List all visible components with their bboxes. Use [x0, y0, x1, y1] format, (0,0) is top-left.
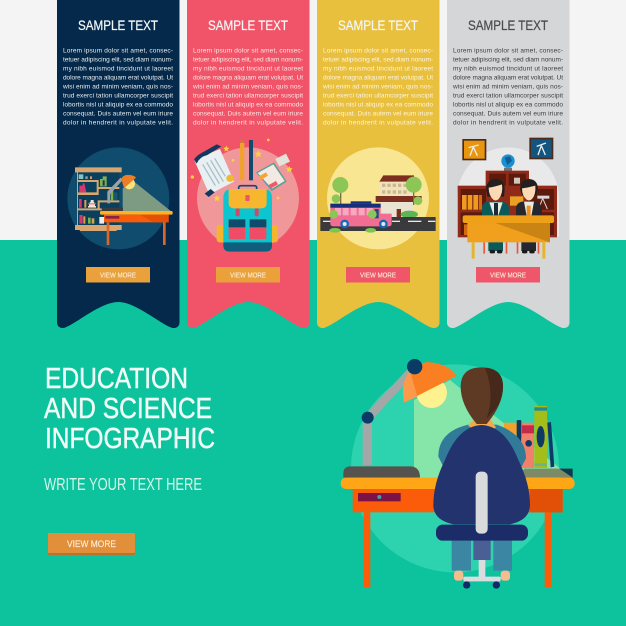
button: yellow ribbon — [346, 267, 410, 282]
text block: coral ribbon — [192, 48, 303, 126]
person and chair — [433, 367, 530, 589]
button: main view more — [48, 533, 135, 555]
text block: navy ribbon: tetuer adipiscing elit, sed diam nonum- — [63, 56, 173, 64]
lamp light beam — [414, 380, 560, 478]
text block: yellow ribbon: consequat. Duis autem vel eum iriure — [323, 110, 433, 118]
title: AND SCIENCE — [44, 393, 212, 425]
text block: coral ribbon: consequat. Duis autem vel eum iriure — [193, 110, 303, 118]
text block: navy ribbon — [62, 48, 173, 126]
text block: grey ribbon: lobortis nisl ut aliquip ex ea commodo — [453, 102, 563, 108]
text block: navy ribbon: Lorem ipsum dolor sit amet, consec- — [63, 48, 173, 54]
text block: grey ribbon: dolor in hendrerit in vulputate velit. — [453, 120, 563, 126]
text block: grey ribbon: tetuer adipiscing elit, sed diam nonum- — [453, 56, 563, 64]
text block: yellow ribbon: dolore magna aliquam erat volutpat. Ut — [323, 74, 433, 82]
text block: navy ribbon: trud exerci tation ullamcorper suscipit — [63, 92, 173, 100]
text block: coral ribbon: wisi enim ad minim veniam, quis nos- — [192, 84, 303, 90]
text block: grey ribbon — [452, 48, 563, 126]
heading: yellow ribbon: SAMPLE TEXT — [338, 17, 418, 33]
text block: yellow ribbon: lobortis nisl ut aliquip ex ea commodo — [323, 102, 433, 108]
text block: navy ribbon: lobortis nisl ut aliquip ex ea commodo — [63, 102, 173, 108]
heading: coral ribbon: SAMPLE TEXT — [208, 17, 288, 33]
text block: coral ribbon: my nibh euismod tincidunt ut laoreet — [193, 66, 303, 72]
text block: coral ribbon: trud exerci tation ullamcorper suscipit — [193, 92, 303, 100]
button: navy ribbon: VIEW MORE — [100, 272, 136, 280]
text block: navy ribbon: my nibh euismod tincidunt ut laoreet — [63, 66, 173, 72]
text block: yellow ribbon: dolor in hendrerit in vulputate velit. — [323, 120, 433, 126]
button: navy ribbon — [86, 267, 150, 282]
background circle — [351, 364, 559, 572]
illustration: student at desk from behind — [341, 359, 575, 589]
heading: navy ribbon: SAMPLE TEXT — [78, 17, 158, 33]
text block: yellow ribbon — [322, 48, 433, 126]
text block: coral ribbon: dolor in hendrerit in vulputate velit. — [193, 120, 303, 126]
text block: grey ribbon: wisi enim ad minim veniam, quis nos- — [452, 84, 563, 90]
illustration: students at desk in library — [457, 138, 559, 259]
text block: coral ribbon: lobortis nisl ut aliquip ex ea commodo — [193, 102, 303, 108]
text block: yellow ribbon: wisi enim ad minim veniam, quis nos- — [322, 84, 433, 90]
illustration: bookshelf and desk lamp — [67, 147, 173, 249]
text block: navy ribbon: wisi enim ad minim veniam, quis nos- — [62, 84, 173, 90]
text block: grey ribbon: my nibh euismod tincidunt ut laoreet — [453, 66, 563, 72]
lamp — [343, 359, 457, 478]
text block: navy ribbon: dolor in hendrerit in vulputate velit. — [63, 120, 173, 126]
button: grey ribbon: VIEW MORE — [490, 272, 526, 280]
illustration: backpack and school supplies — [191, 139, 299, 252]
text block: yellow ribbon: tetuer adipiscing elit, sed diam nonum- — [323, 56, 433, 64]
books — [504, 406, 573, 478]
title: EDUCATION — [45, 363, 188, 395]
title: INFOGRAPHIC — [45, 423, 215, 455]
text block: navy ribbon: dolore magna aliquam erat volutpat. Ut — [63, 74, 173, 82]
text block: grey ribbon: trud exerci tation ullamcorper suscipit — [453, 92, 563, 100]
button: coral ribbon — [216, 267, 280, 282]
text block: yellow ribbon: Lorem ipsum dolor sit amet, consec- — [323, 48, 433, 54]
heading: grey ribbon: SAMPLE TEXT — [468, 17, 548, 33]
button: main view more: VIEW MORE — [67, 539, 116, 549]
panel: yellow ribbon — [317, 0, 440, 328]
panel: navy ribbon — [57, 0, 180, 328]
text block: coral ribbon: tetuer adipiscing elit, sed diam nonum- — [193, 56, 303, 64]
button: coral ribbon: VIEW MORE — [230, 272, 266, 280]
illustration: school bus and building — [320, 147, 436, 249]
text block: navy ribbon: consequat. Duis autem vel eum iriure — [63, 110, 173, 118]
title — [44, 363, 215, 455]
text block: yellow ribbon: trud exerci tation ullamcorper suscipit — [323, 92, 433, 100]
button: grey ribbon — [476, 267, 540, 282]
text block: coral ribbon: dolore magna aliquam erat volutpat. Ut — [193, 74, 303, 82]
text block: grey ribbon: dolore magna aliquam erat volutpat. Ut — [453, 74, 563, 82]
button: yellow ribbon: VIEW MORE — [360, 272, 396, 280]
panel: grey ribbon — [447, 0, 570, 328]
desk — [341, 478, 575, 587]
text block: yellow ribbon: my nibh euismod tincidunt ut laoreet — [323, 66, 433, 72]
panel: coral ribbon — [187, 0, 310, 328]
text block: grey ribbon: consequat. Duis autem vel eum iriure — [453, 110, 563, 118]
text block: grey ribbon: Lorem ipsum dolor sit amet, consec- — [453, 48, 563, 54]
text block: coral ribbon: Lorem ipsum dolor sit amet, consec- — [193, 48, 303, 54]
subtitle: WRITE YOUR TEXT HERE — [44, 474, 202, 494]
